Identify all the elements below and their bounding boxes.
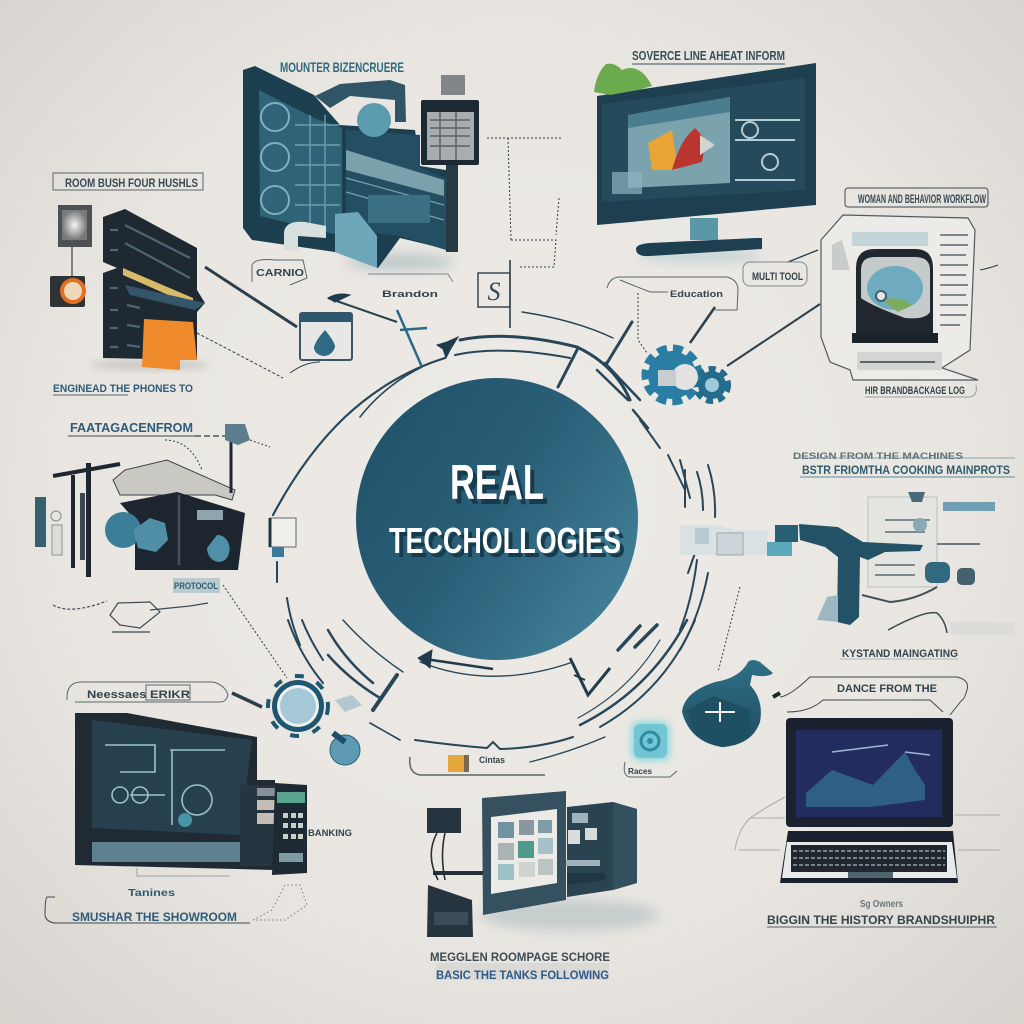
label: gears: Education (670, 289, 723, 299)
right-middle panel: teal robotic arm (680, 492, 1015, 635)
arrow: lower left (418, 650, 493, 669)
label: top right: SOVERCE LINE AHEAT INFORM (632, 48, 785, 63)
label: bottom centre: BASIC THE TANKS FOLLOWING (436, 968, 609, 982)
icon: S box: S (488, 277, 500, 306)
label: bottom left: Tanines (128, 888, 176, 899)
label: bottom right: Sg Owners (860, 899, 903, 910)
label: bottom right: BIGGIN THE HISTORY BRANDSHUIPHR (767, 913, 995, 927)
small colored block icon (410, 755, 545, 775)
label: bottom centre (430, 950, 610, 982)
top-left panel: folded blueprint book (243, 66, 458, 270)
orbit rings around the centre (273, 312, 715, 762)
label: bottom left: SMUSHAR THE SHOWROOM (72, 910, 237, 924)
label: arm (793, 451, 1015, 477)
icon: S box (478, 273, 510, 307)
small connector icons (270, 273, 510, 557)
icon: left ring tab (270, 518, 296, 557)
label: servers (53, 173, 203, 190)
label: book callout: CARNIO (256, 268, 304, 279)
bottom-left panel: monitor and card terminal (75, 713, 307, 876)
left panel: server racks (50, 205, 210, 370)
label: laptop: DANCE FROM THE (837, 683, 937, 695)
label: machine: FAATAGACENFROM (70, 421, 193, 435)
label: book callout (252, 260, 307, 285)
label: terminal: BANKING (308, 828, 352, 838)
label: monitor: Neessaes ERIKR (87, 689, 190, 701)
arrow: bird top (437, 337, 458, 358)
arrow markers on the ring (328, 294, 610, 695)
label: top left: MOUNTER BIZENCRUERE (280, 59, 404, 75)
label: below machine: PROTOCOL (174, 581, 218, 591)
label: app icon (624, 762, 677, 777)
arrow: teal cross (397, 310, 427, 367)
left-middle panel: machine (35, 424, 250, 593)
glowing app icon (632, 722, 669, 760)
title: REAL TECCHOLLOGIES: REAL (450, 456, 544, 510)
title: REAL TECCHOLLOGIES: TECCHOLLOGIES (389, 520, 621, 561)
top-right panel: desktop monitor (594, 63, 816, 262)
dial gadget (268, 676, 362, 765)
teal bag icon (682, 660, 780, 747)
label: app icon: Races (628, 767, 653, 776)
label: ring centre bottom: Cintas (479, 755, 505, 765)
title: REAL TECCHOLLOGIES (389, 456, 625, 565)
right-top panel: document with device (821, 215, 978, 380)
bottom-centre panel: tablet and case (427, 791, 660, 937)
sketch icons below machine (53, 601, 208, 632)
title: REAL TECCHOLLOGIES: TECCHOLLOGIES (393, 524, 625, 565)
title: REAL TECCHOLLOGIES: REAL (454, 461, 548, 515)
label: ring top left: Brandon (382, 289, 438, 299)
label: multi (743, 262, 807, 286)
label: under document: HIR BRANDBACKAGE LOG (865, 385, 965, 397)
label: laptop (780, 677, 968, 715)
label: servers: ROOM BUSH FOUR HUSHLS (65, 176, 198, 190)
label: gears (607, 277, 738, 310)
label: monitor (67, 682, 228, 702)
centre disc with title (356, 378, 638, 660)
label: document (845, 188, 988, 207)
label: bottom centre: MEGGLEN ROOMPAGE SCHORE (430, 950, 610, 964)
gears icon (645, 348, 728, 402)
connector lines and dashed paths (165, 138, 998, 920)
label: under servers: ENGINEAD THE PHONES TO (53, 383, 193, 395)
label: ring top left (368, 274, 453, 299)
label: bottom right (767, 899, 997, 927)
icon: window with drop (300, 313, 352, 360)
arrow: lower right (570, 658, 610, 695)
arrow: top-left head (328, 294, 350, 302)
bottom-right panel: laptop (735, 718, 1000, 883)
label: bottom left (45, 888, 250, 924)
tablet beside book (421, 75, 479, 252)
label: multi: MULTI TOOL (752, 271, 803, 283)
label: arm lower: KYSTAND MAINGATING (842, 648, 958, 660)
label: arm: DESIGN FROM THE MACHINES (793, 451, 963, 461)
